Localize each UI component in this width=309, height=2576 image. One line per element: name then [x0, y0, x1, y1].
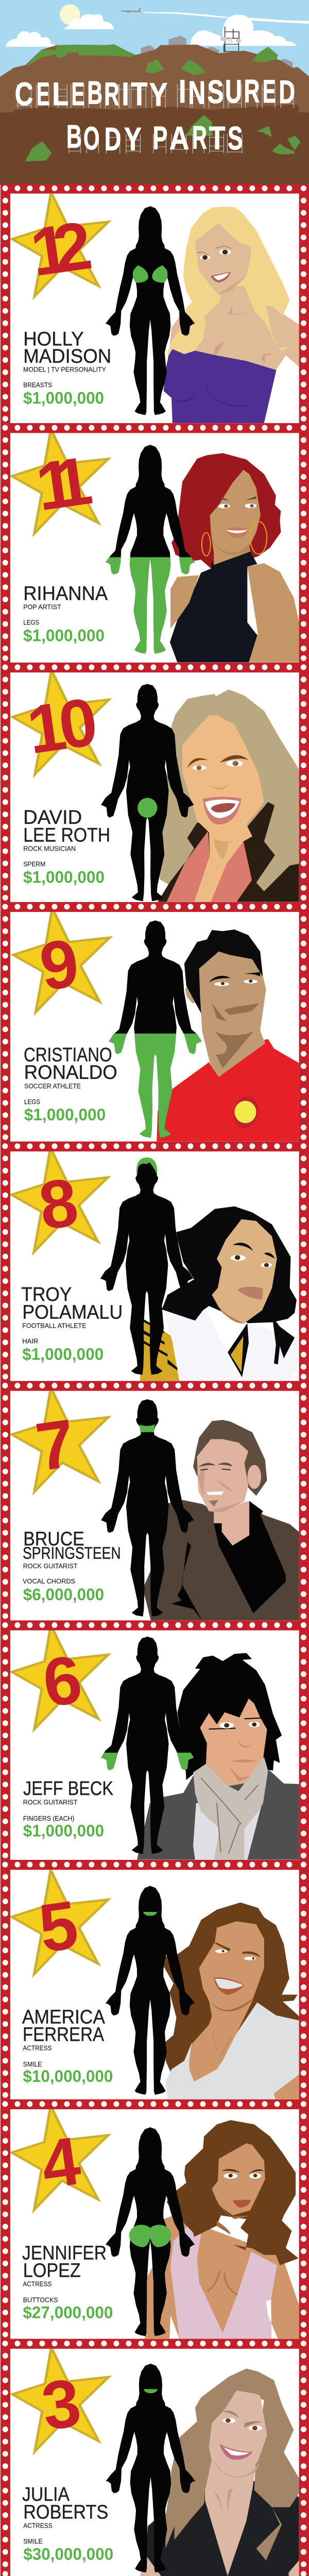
- caption: Jeff Beck: [23, 1778, 113, 1840]
- rank badge: 11: 11: [31, 443, 95, 525]
- caption: Bruce Springsteen: VOCAL CHORDS: [23, 1578, 75, 1585]
- caption: Jennifer Lopez: [22, 2243, 113, 2321]
- silhouette: smile highlighted: [106, 1886, 195, 2095]
- title: E: [37, 76, 49, 112]
- title: D: [279, 74, 295, 110]
- rank badge: 7: 7: [31, 1405, 79, 1485]
- rank badge: 10: 10: [23, 684, 99, 768]
- rank badge: 5: [12, 1870, 108, 1974]
- title: D: [105, 122, 121, 158]
- portrait: Holly Madison: [164, 207, 299, 423]
- rank badge: 8: 8: [35, 1164, 82, 1244]
- portrait: Bruce Springsteen: [143, 1420, 299, 1620]
- title: R: [244, 73, 260, 109]
- header: Hollywood hill scene: [0, 0, 309, 184]
- caption: Bruce Springsteen: ROCK GUITARIST: [23, 1562, 77, 1570]
- caption: Jeff Beck: ROCK GUITARIST: [23, 1799, 77, 1806]
- caption: Holly Madison: HOLLY: [23, 329, 84, 350]
- silhouette: hair highlighted: [100, 1158, 193, 1375]
- caption: Cristiano Ronaldo: RONALDO: [24, 1062, 117, 1083]
- rank badge: 7: [12, 1387, 108, 1492]
- rank badge: 12: [12, 192, 109, 296]
- caption: David Lee Roth: SPERM: [23, 860, 45, 868]
- caption: Jeff Beck: JEFF BECK: [23, 1778, 113, 1800]
- panel 4: Jennifer Lopez: [10, 2106, 299, 2339]
- title: E: [263, 74, 276, 110]
- caption: David Lee Roth: ROCK MUSICIAN: [23, 845, 76, 853]
- caption: Rihanna: [23, 583, 108, 645]
- caption: Troy Polamalu: [21, 1284, 123, 1363]
- caption: Jeff Beck: $1,000,000: [23, 1821, 104, 1840]
- caption: David Lee Roth: LEE ROTH: [23, 824, 110, 846]
- caption: Troy Polamalu: $1,000,000: [22, 1345, 104, 1363]
- title: S: [228, 121, 243, 157]
- title: S: [208, 74, 224, 110]
- caption: Troy Polamalu: POLAMALU: [22, 1301, 123, 1323]
- panel 9: Cristiano Ronaldo: [10, 908, 299, 1142]
- title: R: [192, 120, 207, 156]
- rank badge: 12: 12: [26, 207, 94, 291]
- rank badge: 6: 6: [38, 1641, 87, 1721]
- panel 8: Troy Polamalu: [10, 1148, 299, 1381]
- caption: Jeff Beck: FINGERS (EACH): [23, 1815, 74, 1822]
- panel 11: Rihanna: [10, 429, 299, 663]
- panel 5: America Ferrera: [10, 1870, 299, 2099]
- silhouette: buttocks highlighted: [106, 2127, 195, 2336]
- caption: Jennifer Lopez: JENNIFER: [22, 2243, 107, 2264]
- caption: Julia Roberts: ACTRESS: [23, 2522, 53, 2530]
- panel 3: Julia Roberts: [10, 2347, 299, 2576]
- portrait: Cristiano Ronaldo: [157, 929, 299, 1142]
- caption: Julia Roberts: ROBERTS: [23, 2501, 108, 2523]
- title: P: [153, 120, 167, 156]
- silhouette: legs highlighted: [106, 445, 195, 654]
- caption: Troy Polamalu: HAIR: [22, 1337, 38, 1345]
- caption: David Lee Roth: [23, 807, 110, 886]
- rank badge: 6: [12, 1625, 108, 1729]
- silhouette: legs highlighted: [109, 920, 202, 1138]
- portrait: Julia Roberts: [140, 2368, 299, 2576]
- title: B: [66, 119, 82, 155]
- title: U: [225, 74, 242, 110]
- caption: Jennifer Lopez: LOPEZ: [23, 2260, 81, 2281]
- caption: America Ferrera: ACTRESS: [23, 2044, 52, 2052]
- silhouette: breasts highlighted: [106, 206, 195, 415]
- silhouette: vocal chords highlighted: [101, 1399, 194, 1617]
- caption: Holly Madison: MODEL | TV PERSONALITY: [23, 366, 106, 374]
- caption: America Ferrera: FERRERA: [23, 2024, 105, 2046]
- caption: Rihanna: $1,000,000: [23, 626, 105, 645]
- scene artwork: [0, 0, 309, 184]
- caption: Holly Madison: $1,000,000: [23, 388, 104, 407]
- panel 12: Holly Madison: [10, 192, 299, 423]
- title: O: [83, 121, 99, 157]
- caption: Cristiano Ronaldo: [24, 1044, 117, 1124]
- portrait: Jeff Beck: [137, 1653, 299, 1860]
- caption: America Ferrera: SMILE: [23, 2060, 42, 2068]
- caption: Cristiano Ronaldo: LEGS: [24, 1098, 40, 1106]
- caption: Holly Madison: MADISON: [23, 346, 111, 367]
- silhouette: smile highlighted: [106, 2364, 195, 2572]
- title: C: [15, 76, 33, 112]
- caption: Rihanna: POP ARTIST: [23, 603, 61, 611]
- portrait: Troy Polamalu: [140, 1207, 298, 1381]
- caption: Bruce Springsteen: BRUCE: [23, 1529, 84, 1550]
- title: B: [88, 75, 102, 111]
- caption: Jennifer Lopez: $27,000,000: [23, 2303, 113, 2321]
- rank badge: 3: 3: [37, 2364, 85, 2445]
- caption: America Ferrera: $10,000,000: [23, 2067, 113, 2086]
- rank badge: 10: [12, 670, 109, 774]
- rank badge: 4: [12, 2106, 108, 2210]
- portrait: Jennifer Lopez: [145, 2120, 299, 2338]
- title: T: [131, 76, 147, 112]
- silhouette: fingers highlighted: [101, 1636, 194, 1854]
- portrait: David Lee Roth: [158, 689, 299, 902]
- title: A: [169, 120, 189, 156]
- title: I: [179, 74, 186, 110]
- rank badge: 8: [11, 1148, 108, 1252]
- title: Y: [149, 77, 167, 113]
- title: N: [188, 75, 205, 111]
- caption: Cristiano Ronaldo: $1,000,000: [24, 1105, 106, 1124]
- caption: America Ferrera: [22, 2006, 113, 2086]
- caption: Troy Polamalu: FOOTBALL ATHLETE: [22, 1322, 87, 1330]
- caption: Holly Madison: BREASTS: [23, 381, 53, 389]
- title: L: [52, 76, 68, 112]
- caption: Bruce Springsteen: $6,000,000: [23, 1585, 104, 1604]
- panel 6: Jeff Beck: [10, 1625, 299, 1860]
- caption: Julia Roberts: [22, 2484, 113, 2563]
- silhouette: sperm area highlighted: [101, 684, 194, 901]
- title: E: [71, 76, 84, 112]
- title: I: [122, 76, 129, 112]
- caption: Bruce Springsteen: SPRINGSTEEN: [23, 1544, 121, 1563]
- caption: Julia Roberts: JULIA: [22, 2484, 70, 2505]
- caption: Jennifer Lopez: ACTRESS: [23, 2280, 52, 2288]
- caption: Rihanna: RIHANNA: [23, 583, 108, 604]
- caption: Cristiano Ronaldo: SOCCER ATHLETE: [24, 1082, 81, 1090]
- caption: Rihanna: LEGS: [23, 619, 39, 626]
- caption: David Lee Roth: $1,000,000: [23, 868, 105, 886]
- caption: Cristiano Ronaldo: CRISTIANO: [24, 1044, 112, 1066]
- panel 7: Bruce Springsteen: [10, 1387, 299, 1620]
- title: R: [105, 76, 119, 112]
- caption: Bruce Springsteen: [23, 1529, 121, 1604]
- title: T: [209, 120, 226, 156]
- caption: Holly Madison: [23, 329, 111, 407]
- title: Y: [124, 122, 142, 158]
- caption: Julia Roberts: $30,000,000: [23, 2545, 113, 2563]
- rank badge: 3: [12, 2347, 109, 2452]
- caption: David Lee Roth: DAVID: [23, 807, 82, 828]
- rank badge: 5: 5: [35, 1886, 82, 1967]
- panel 10: David Lee Roth: [10, 670, 299, 902]
- caption: Julia Roberts: SMILE: [23, 2537, 43, 2545]
- rank badge: 9: [13, 908, 110, 1012]
- rank badge: 4: 4: [37, 2123, 85, 2202]
- portrait: America Ferrera: [164, 1903, 299, 2099]
- rank badge: 9: 9: [35, 924, 83, 1005]
- portrait: Rihanna: [170, 453, 299, 663]
- caption: Jennifer Lopez: BUTTOCKS: [23, 2296, 58, 2303]
- rank badge: 11: [12, 429, 108, 533]
- title: [15, 73, 295, 158]
- caption: Troy Polamalu: TROY: [21, 1284, 72, 1306]
- caption: America Ferrera: AMERICA: [22, 2006, 106, 2028]
